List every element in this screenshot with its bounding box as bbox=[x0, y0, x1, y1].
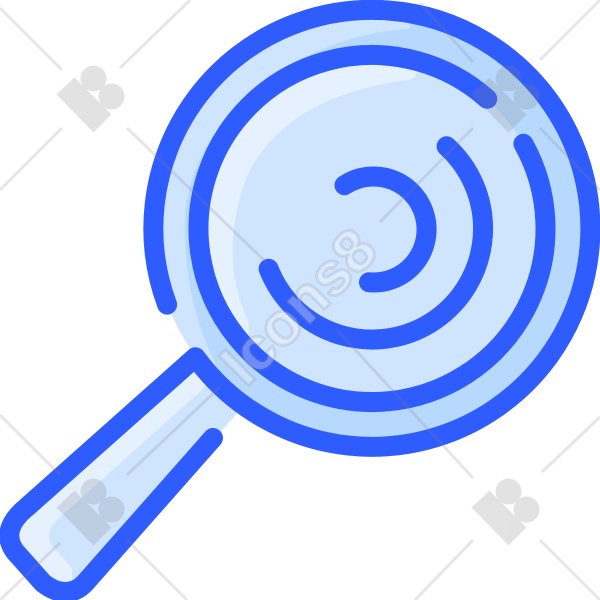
ring: third spiral arc bbox=[269, 146, 483, 340]
watermark logo top left bbox=[56, 66, 124, 132]
inner lens bbox=[199, 56, 545, 402]
lens base bbox=[154, 10, 590, 446]
ring: inner spiral arc bbox=[344, 176, 427, 282]
ring: second spiral arc bbox=[198, 55, 545, 402]
watermark text: Icons8 bbox=[207, 215, 389, 397]
handle highlight bbox=[13, 365, 213, 585]
inner lens highlight bbox=[208, 65, 418, 336]
watermark logo bottom right bbox=[472, 478, 540, 546]
watermark logo bottom left bbox=[56, 478, 124, 546]
handle fill bbox=[13, 359, 240, 590]
watermark logo top right bbox=[472, 66, 540, 132]
lens outer darker band bbox=[185, 23, 580, 437]
